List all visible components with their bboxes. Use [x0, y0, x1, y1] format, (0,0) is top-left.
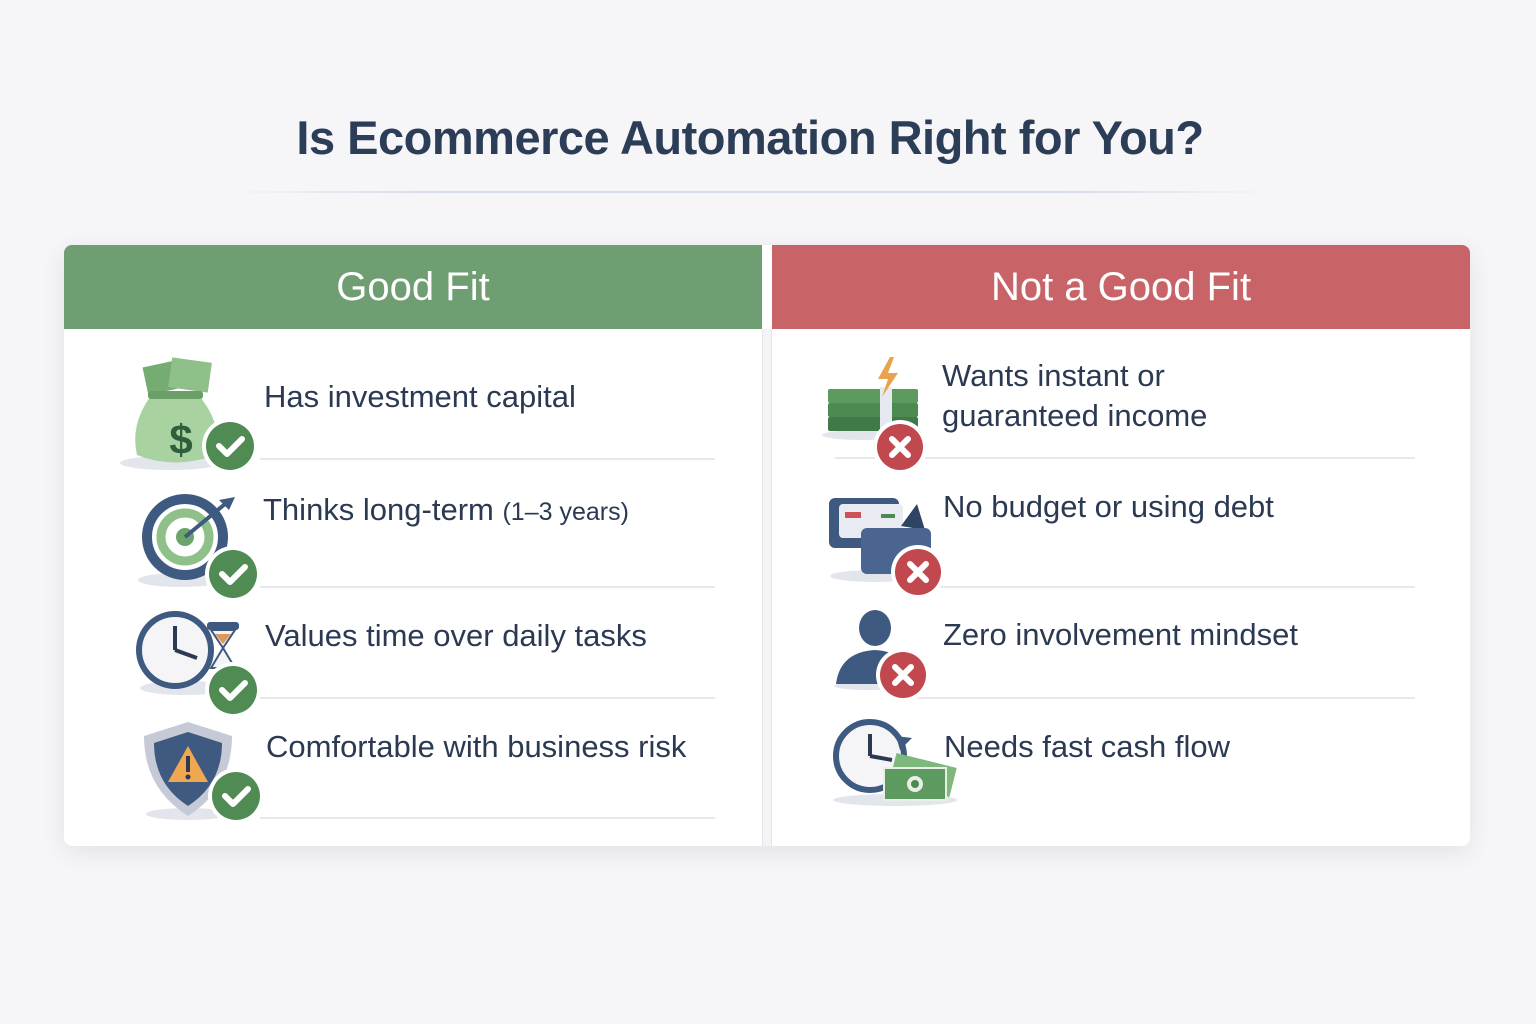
text: wants instant income: guaranteed income: [942, 398, 1207, 433]
text: zero involvement: Zero involvement mindset: [943, 617, 1298, 652]
text: values time: Values time over daily tasks: [265, 618, 647, 653]
text: has investment capital: Has investment capital: [264, 379, 576, 414]
text: wants instant income: Wants instant or: [942, 358, 1165, 393]
card: [64, 245, 1470, 846]
text: no budget: No budget or using debt: [943, 489, 1274, 524]
panel: not a good fit header: Not a Good Fit: [991, 265, 1251, 309]
icon: person: [834, 610, 926, 699]
panel: good fit header: [64, 245, 762, 329]
icon: clock with cash: [833, 719, 957, 806]
text: wants instant income: [942, 358, 1207, 433]
text: needs fast cash: Needs fast cash flow: [944, 729, 1230, 764]
icon: credit cards: [829, 498, 941, 595]
title: Is Ecommerce Automation Right for You?: [296, 111, 1204, 164]
icon: cash stack with bolt: [822, 357, 925, 470]
icon: money bag: $: [169, 416, 193, 463]
icon: clock and hourglass: [136, 611, 257, 714]
text: comfortable with risk: Comfortable with business risk: [266, 729, 686, 764]
text: thinks long-term: Thinks long-term (1–3 years): [263, 492, 629, 527]
icon: target: [138, 494, 257, 598]
panel: not a good fit header: [772, 245, 1470, 329]
icon: shield warning: [144, 722, 260, 820]
panel: good fit header: Good Fit: [336, 265, 490, 309]
icon: money bag: [120, 357, 254, 470]
